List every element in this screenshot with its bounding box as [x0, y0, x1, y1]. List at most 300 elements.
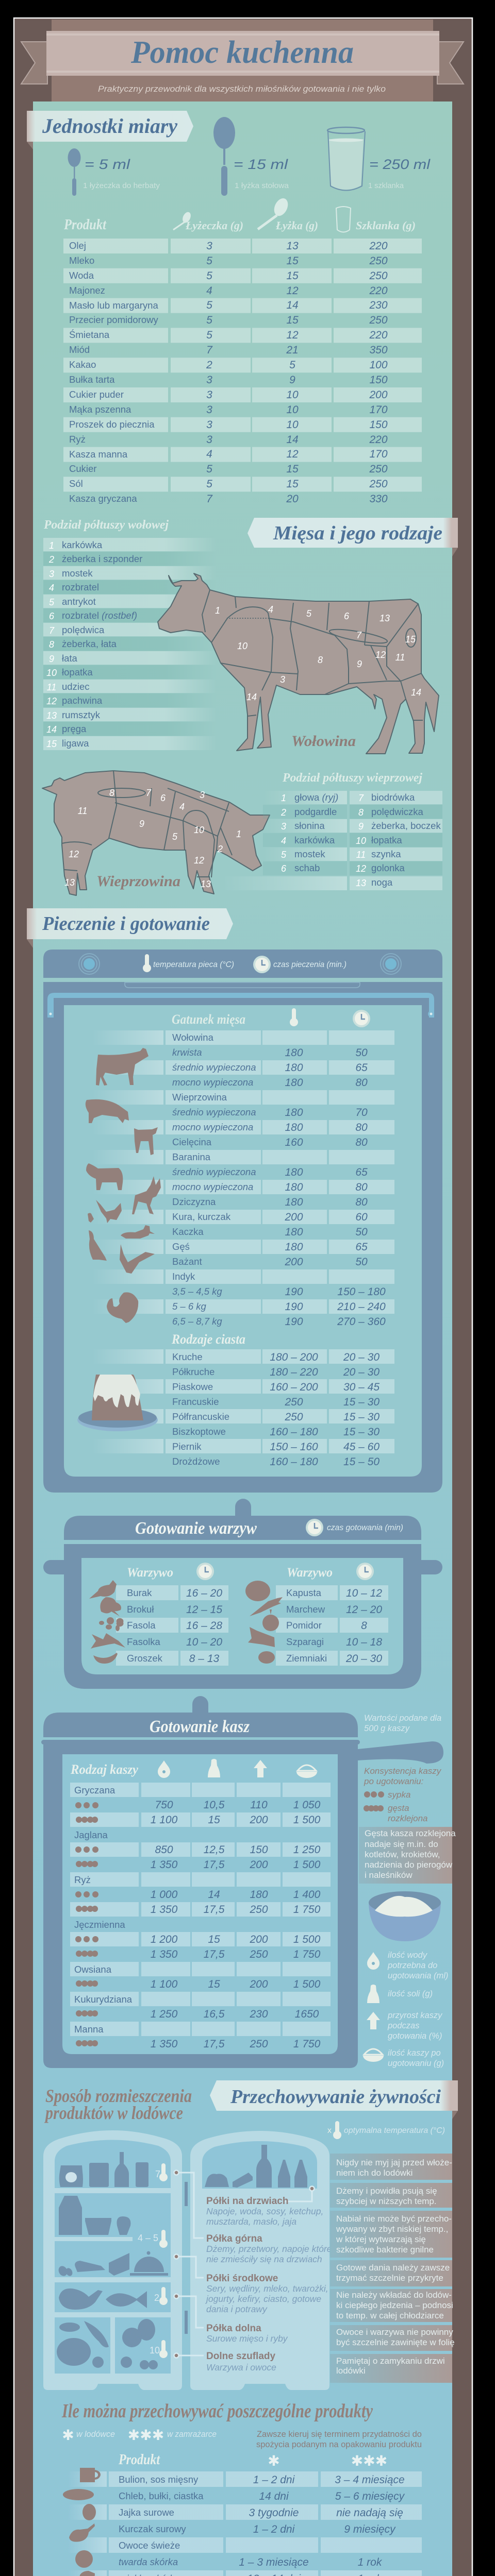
- heading: fridge layout: [44, 2086, 192, 2123]
- heading: Pieczenie i gotowanie: Pieczenie i gotowanie: [42, 913, 210, 935]
- roasting table: Gatunek mięsa: [172, 1012, 245, 1027]
- grain table: 110: [250, 1799, 268, 1811]
- pot: vegetables lid: czas gotowania (min): [327, 1523, 403, 1532]
- pork cuts list: łopatka: [371, 835, 402, 845]
- ribbon tails: [21, 42, 464, 84]
- measures table: 170: [369, 404, 388, 416]
- grain icons legend: ugotowania (ml): [388, 1971, 448, 1980]
- pastry table: Francuskie: [172, 1396, 219, 1407]
- roasting table: 180: [285, 1166, 303, 1178]
- grain table: 1 200: [151, 1934, 178, 1945]
- pig diagram: 13: [64, 877, 75, 888]
- storage table: nie nadają się: [336, 2507, 403, 2519]
- beef cuts list: mostek: [62, 568, 93, 579]
- storage tips: Dżemy i powidła psują się: [336, 2186, 437, 2196]
- beef cuts list: 15: [46, 739, 57, 749]
- storage tips: Nabiał nie może być przecho-: [336, 2214, 452, 2224]
- vegetable cooking table: Fasola: [127, 1620, 156, 1631]
- measure: glass: 1 szklanka: [368, 182, 404, 190]
- beef cuts list: 9: [49, 654, 54, 664]
- beef cuts list: rozbratel: [62, 582, 99, 592]
- storage table: 9 miesięcy: [344, 2523, 396, 2535]
- beef cuts list: żeberka, łata: [62, 638, 117, 649]
- pig diagram: 1: [236, 829, 241, 839]
- pig diagram: 5: [172, 832, 178, 842]
- measures table: 4: [206, 285, 212, 297]
- vegetable cooking table: 20 – 30: [345, 1653, 382, 1665]
- roasting table: Wołowina: [172, 1032, 214, 1043]
- pork cuts list: 11: [356, 850, 366, 860]
- legend: fridge and freezer: ✱✱✱: [128, 2427, 164, 2444]
- grain icons legend: ugotowaniu (g): [388, 2059, 444, 2068]
- roasting table: 200: [284, 1211, 303, 1223]
- vegetable cooking table: 10 – 18: [346, 1636, 382, 1648]
- roasting table: 150 – 180: [337, 1286, 386, 1298]
- heading: fridge layout: Sposób rozmieszczenia: [45, 2086, 192, 2106]
- grain table: 17,5: [204, 1948, 225, 1960]
- measures table header: Łyżeczka (g): [185, 219, 243, 232]
- storage table: twarda skórka: [119, 2556, 178, 2567]
- grain table: Jęczmienna: [74, 1919, 125, 1930]
- vegetable cooking table: Warzywo: [127, 1566, 173, 1580]
- pig diagram: 8: [109, 788, 114, 798]
- grain table: 750: [155, 1799, 173, 1811]
- roasting table: 180: [285, 1241, 303, 1253]
- pot: grains lid: [43, 1696, 358, 1737]
- grain table: 10,5: [204, 1799, 225, 1811]
- icons: deli and cooked food: [57, 2251, 168, 2277]
- pastry table: 15 – 30: [343, 1426, 380, 1438]
- measures table: Cukier puder: [69, 389, 124, 400]
- vegetable cooking table: Warzywo: [287, 1566, 333, 1580]
- fridge shelf descriptions: Półki środkowe: [206, 2273, 278, 2284]
- pig diagram: 11: [78, 806, 87, 816]
- pastry table: 15 – 30: [343, 1411, 380, 1423]
- cow diagram: 8: [318, 655, 323, 665]
- measures table: 3: [206, 419, 212, 431]
- note: use-by date: [256, 2430, 422, 2449]
- beef cuts list: pręga: [62, 723, 87, 734]
- note: use-by date: spożycia podanym na opakowaniu produktu: [256, 2440, 422, 2449]
- temperature labels: [138, 2163, 168, 2358]
- fridge shelf descriptions: Dżemy, przetwory, napoje które: [206, 2244, 332, 2254]
- grain icons legend: ilość soli (g): [388, 1989, 433, 1998]
- measures table: Olej: [69, 240, 86, 251]
- note: values per 500 g: Wartości podane dla: [364, 1714, 441, 1723]
- grain table: 1 050: [293, 1799, 321, 1811]
- grain table: Owsiana: [74, 1964, 112, 1975]
- fridge shelf descriptions: Półka dolna: [206, 2323, 261, 2334]
- measures table: 14: [286, 434, 299, 446]
- icons: door shelf items: [205, 2145, 307, 2188]
- cow diagram: 6: [344, 611, 350, 621]
- temperature legend: [327, 2121, 445, 2139]
- cow diagram: 14: [411, 687, 421, 698]
- grain table: 1 500: [293, 1859, 321, 1871]
- storage tips: w której wytwarzają się: [336, 2234, 426, 2244]
- measures table: 5: [206, 299, 212, 311]
- grain table: 1 350: [151, 2038, 178, 2050]
- vegetable cooking table: Brokuł: [127, 1604, 154, 1615]
- pastry table: 160 – 200: [270, 1381, 318, 1393]
- vegetable cooking table: Burak: [127, 1587, 152, 1598]
- storage table: 1 rok: [358, 2556, 383, 2568]
- title ribbon: [46, 31, 439, 76]
- pork cuts list: 8: [358, 807, 364, 818]
- storage tips: [330, 2154, 455, 2383]
- fridge shelf descriptions: Półki na drzwiach: [206, 2196, 288, 2207]
- oven control panel: czas pieczenia (min.): [273, 960, 346, 969]
- roasting table: 6,5 – 8,7 kg: [172, 1316, 222, 1327]
- pastry table: 15 – 50: [343, 1456, 380, 1468]
- pastry table: 180 – 220: [270, 1366, 318, 1378]
- heading: storage durations: Ile można przechowywać poszczególne produkty: [61, 2400, 373, 2422]
- beef cuts list: 2: [48, 554, 54, 565]
- beef cuts list: antrykot: [62, 596, 96, 607]
- grain table: 150: [250, 1844, 268, 1856]
- measures table: Kasza manna: [69, 449, 128, 460]
- pork cuts list: polędwiczka: [371, 806, 423, 817]
- vegetable cooking table: 8 – 13: [189, 1653, 220, 1665]
- beef cuts list: ligawa: [62, 738, 89, 749]
- grain table: 200: [249, 1934, 268, 1945]
- consistency legend: po ugotowaniu:: [364, 1776, 424, 1786]
- roasting table: 180: [285, 1107, 303, 1118]
- icon: cake: [77, 1375, 158, 1431]
- heading: Jednostki miary: Jednostki miary: [42, 114, 177, 138]
- grain table: Gryczana: [74, 1785, 116, 1795]
- pastry table: 160 – 180: [270, 1456, 318, 1468]
- vegetable cooking table: 8: [361, 1620, 367, 1632]
- grain icons legend: ilość kaszy po: [388, 2048, 441, 2058]
- measures table: 20: [286, 493, 299, 505]
- measures table: 220: [369, 434, 388, 446]
- grain table: 17,5: [204, 2038, 225, 2050]
- roasting table: Gęś: [172, 1241, 190, 1252]
- roasting table: 65: [355, 1241, 368, 1253]
- measures table: 250: [369, 255, 388, 267]
- grain table: 250: [249, 2038, 268, 2050]
- pork cuts list: mostek: [294, 849, 325, 859]
- roasting table: 3,5 – 4,5 kg: [172, 1286, 222, 1297]
- measures table: 14: [286, 299, 299, 311]
- measures table: Woda: [69, 270, 94, 281]
- beef cuts list: 12: [46, 696, 57, 706]
- measures table: Sól: [69, 478, 83, 489]
- roasting table: 50: [355, 1226, 368, 1238]
- roasting table: 80: [355, 1077, 368, 1089]
- beef cuts list: łata: [62, 653, 78, 664]
- roasting table: 180: [285, 1122, 303, 1133]
- roasting table: średnio wypieczona: [172, 1107, 256, 1117]
- grain table: 200: [249, 1978, 268, 1990]
- fridge shelf descriptions: [205, 2196, 332, 2372]
- measures table: 150: [369, 374, 388, 386]
- pork cuts list: 10: [356, 836, 366, 846]
- grain table: 1 500: [293, 1978, 321, 1990]
- temperature labels: 10: [150, 2345, 160, 2355]
- grain table: 230: [249, 2008, 268, 2020]
- vegetable cooking table: Kapusta: [286, 1587, 322, 1598]
- pastry table: 20 – 30: [343, 1366, 380, 1378]
- measures table: 150: [369, 419, 388, 431]
- measures table: 5: [206, 463, 212, 475]
- grain table: 1 350: [151, 1948, 178, 1960]
- measures table: 12: [286, 285, 299, 297]
- note: values per 500 g: 500 g kaszy: [364, 1724, 410, 1733]
- storage table: 14 dni: [259, 2490, 289, 2502]
- consistency legend: gęsta: [388, 1803, 409, 1813]
- cow diagram: 3: [280, 674, 285, 685]
- pastry table: Półkruche: [172, 1366, 214, 1377]
- storage tips: lodówki: [336, 2366, 366, 2376]
- measures table: Kasza gryczana: [69, 493, 137, 504]
- storage tips: trzymać szczelnie przykryte: [336, 2273, 443, 2283]
- fridge interior: [43, 2130, 182, 2390]
- beef cuts list: 10: [46, 668, 57, 678]
- measures table header: Szklanka (g): [356, 219, 416, 232]
- pig diagram: 12: [69, 849, 79, 859]
- grain table: 1650: [295, 2008, 319, 2020]
- storage tips: wywany w zbyt niskiej temp.,: [336, 2224, 448, 2234]
- note: values per 500 g: [364, 1714, 441, 1733]
- vegetable cooking table: Ziemniaki: [286, 1653, 327, 1664]
- grain icons legend: podczas: [387, 2021, 419, 2030]
- grain table: 14: [208, 1889, 220, 1901]
- consistency legend: rozklejona: [388, 1814, 428, 1823]
- pork cuts list: noga: [371, 877, 393, 888]
- grain table: 1 500: [293, 1814, 321, 1826]
- roasting table: mocno wypieczona: [172, 1122, 253, 1132]
- beef cuts list: 14: [46, 724, 57, 735]
- measures table: Kakao: [69, 359, 96, 370]
- fridge shelf descriptions: Warzywa i owoce: [206, 2362, 276, 2372]
- heading: Przechowywanie żywności: Przechowywanie żywności: [230, 2086, 441, 2108]
- beef cuts list: 11: [47, 682, 56, 692]
- measures table: 10: [286, 404, 299, 416]
- grain table: 200: [249, 1859, 268, 1871]
- vegetable cooking table: Groszek: [127, 1653, 163, 1664]
- storage table: 3 tygodnie: [249, 2507, 299, 2519]
- grain table: 250: [249, 1904, 268, 1916]
- roasting table: 180: [285, 1047, 303, 1059]
- beef cuts list: 7: [49, 625, 55, 636]
- cow diagram: 7: [356, 630, 362, 640]
- measures table: Miód: [69, 344, 90, 355]
- grain table: Ryż: [74, 1874, 91, 1885]
- grain table: 16,5: [204, 2008, 225, 2020]
- oven body: [43, 982, 442, 1493]
- roasting table: 5 – 6 kg: [172, 1301, 207, 1312]
- pastry table: Piernik: [172, 1441, 202, 1452]
- measures table: 10: [286, 419, 299, 431]
- cow diagram: 9: [357, 659, 362, 669]
- cow diagram: 15: [405, 634, 416, 645]
- pig diagram: 12: [194, 855, 204, 866]
- roasting table: 50: [355, 1256, 368, 1268]
- icon: grain bowl: [369, 1891, 441, 1941]
- heading: fridge layout: produktów w lodówce: [44, 2103, 183, 2123]
- storage table: Chleb, bułki, ciastka: [119, 2490, 204, 2501]
- pastry table: Rodzaje ciasta: [171, 1332, 245, 1347]
- storage tips: to temp. w całej chłodziarce: [336, 2311, 444, 2320]
- measures table: 100: [369, 359, 388, 371]
- grain icons legend: [363, 1951, 448, 2068]
- vegetable cooking table: 12 – 15: [186, 1604, 222, 1616]
- storage table: Bulion, sos mięsny: [119, 2474, 199, 2485]
- pastry table: 250: [284, 1411, 303, 1423]
- measures table: 170: [369, 448, 388, 460]
- grain table: 1 000: [151, 1889, 178, 1901]
- grain table: 1 100: [151, 1978, 178, 1990]
- measures table: 3: [206, 389, 212, 401]
- measures table: 15: [286, 314, 299, 326]
- pig diagram: 3: [200, 790, 205, 800]
- measures table: 4: [206, 448, 212, 460]
- pork cuts list: 3: [281, 821, 286, 832]
- grain table: 850: [155, 1844, 173, 1856]
- roasting table: 80: [355, 1181, 368, 1193]
- pork cuts list: 9: [358, 821, 364, 832]
- title: Pomoc kuchenna: [130, 35, 354, 70]
- measures table: 12: [286, 448, 299, 460]
- storage tips: szybciej w niższych temp.: [336, 2196, 437, 2206]
- pig diagram: 10: [194, 825, 204, 835]
- storage tips: Gotowe dania należy zawsze: [336, 2263, 450, 2273]
- tip box: thick grain: [359, 1827, 456, 1884]
- header band: [52, 20, 433, 102]
- beef cuts list: 6: [49, 611, 55, 621]
- measure: glass: = 250 ml: [369, 157, 431, 172]
- roasting table: Bażant: [172, 1256, 202, 1267]
- roasting table: 80: [355, 1196, 368, 1208]
- fridge shelf descriptions: Surowe mięso i ryby: [206, 2333, 288, 2344]
- roasting table: 180: [285, 1062, 303, 1074]
- measures table: 2: [206, 359, 212, 371]
- vegetable cooking table: 16 – 28: [186, 1620, 222, 1632]
- measures table header: [63, 196, 416, 233]
- grain icons legend: przyrost kaszy: [387, 2011, 443, 2020]
- measure: tablespoon: 1 łyżka stołowa: [235, 182, 289, 190]
- measures table: 5: [206, 255, 212, 267]
- roasting table: 50: [355, 1047, 368, 1059]
- tip box: thick grain: Gęsta kasza rozklejona: [365, 1828, 456, 1838]
- tip box: thick grain: nadzienia do pierogów: [365, 1860, 453, 1870]
- grain table: [70, 1759, 331, 2050]
- measures table: 7: [206, 493, 213, 505]
- pastry table: Drożdżowe: [172, 1456, 220, 1467]
- roasting table: 180: [285, 1181, 303, 1193]
- measures table: 330: [369, 493, 388, 505]
- grain table: 180: [250, 1889, 268, 1901]
- grain table: Kukurydziana: [74, 1994, 133, 2005]
- storage table: Kurczak surowy: [119, 2523, 186, 2534]
- beef cuts list: udziec: [62, 681, 89, 692]
- grain table: Manna: [74, 2024, 104, 2035]
- pastry table: [92, 1332, 394, 1468]
- measures table: Majonez: [69, 285, 105, 296]
- storage tips: Pamiętaj o zamykaniu drzwi: [336, 2356, 445, 2366]
- roasting table: Kaczka: [172, 1226, 204, 1237]
- pastry table: 15 – 30: [343, 1396, 380, 1408]
- measures table: Mleko: [69, 255, 94, 266]
- measures table: 3: [206, 404, 212, 416]
- roasting table: Dziczyzna: [172, 1196, 216, 1207]
- vegetable cooking table: 12 – 20: [346, 1604, 382, 1616]
- beef cuts list: polędwica: [62, 624, 105, 635]
- measures table: 220: [369, 329, 388, 341]
- measures table: 250: [369, 463, 388, 475]
- pot: vegetables lid: [64, 1499, 421, 1540]
- pig diagram: [42, 771, 270, 895]
- vegetable cooking table: Szparagi: [286, 1636, 324, 1647]
- roasting table: mocno wypieczona: [172, 1077, 253, 1088]
- measures table: 15: [286, 270, 299, 282]
- cow diagram: 1: [215, 605, 220, 616]
- icons: stored products: [58, 2468, 104, 2576]
- roasting table: Kura, kurczak: [172, 1211, 231, 1222]
- roasting table: 200: [284, 1256, 303, 1268]
- measures table: 15: [286, 463, 299, 475]
- heading: Przechowywanie żywności: [210, 2080, 458, 2119]
- icon: oven knobs: [79, 954, 401, 974]
- beef cuts list: 5: [49, 597, 55, 607]
- pastry table: Półfrancuskie: [172, 1411, 229, 1422]
- measure: tablespoon: = 15 ml: [234, 157, 288, 172]
- icons: top shelf jars: [59, 2152, 148, 2187]
- vegetable cooking table: Marchew: [286, 1604, 325, 1615]
- roasting table: Indyk: [172, 1271, 195, 1282]
- cow diagram: 10: [237, 641, 248, 651]
- roasting table: 60: [355, 1211, 368, 1223]
- fridge door: [190, 2131, 329, 2390]
- vegetable cooking table: Fasolka: [127, 1636, 160, 1647]
- icons: vegetables and fruit: [57, 2319, 158, 2369]
- pork cuts list: głowa (ryj): [294, 792, 338, 803]
- beef cuts list: 8: [49, 639, 54, 650]
- fridge shelf descriptions: nie zmieściły się na drzwiach: [206, 2254, 322, 2264]
- temperature legend: optymalna temperatura (°C): [344, 2126, 445, 2135]
- storage tips: ki ciepłego jedzenia – podnosi: [336, 2300, 453, 2310]
- note: use-by date: Zawsze kieruj się terminem przydatności do: [257, 2430, 422, 2439]
- measures table: Proszek do piecznia: [69, 419, 155, 430]
- measures table: 15: [286, 478, 299, 490]
- measures table: 250: [369, 478, 388, 490]
- roasting table: średnio wypieczona: [172, 1062, 256, 1073]
- measures table: 5: [206, 478, 212, 490]
- pot: vegetables body: [43, 1544, 442, 1689]
- measures table: Przecier pomidorowy: [69, 314, 158, 325]
- grain table: 17,5: [204, 1859, 225, 1871]
- storage table: [67, 2452, 422, 2576]
- beef cuts list: pachwina: [62, 695, 103, 706]
- grain icons legend: gotowania (%): [388, 2031, 442, 2041]
- cow diagram: 12: [375, 650, 386, 660]
- measure: glass: [327, 127, 431, 191]
- tip box: thick grain: nadaje się m.in. do: [365, 1839, 438, 1849]
- storage tips: niem ich do lodówki: [336, 2168, 412, 2178]
- roasting table: [92, 1008, 394, 1328]
- storage table: ✱✱✱: [351, 2452, 387, 2469]
- legend: fridge and freezer: w lodówce: [76, 2430, 115, 2439]
- roasting table: 70: [355, 1107, 368, 1118]
- cow diagram: 5: [306, 608, 312, 619]
- pork cuts list: [222, 771, 442, 890]
- measures table: 3: [206, 240, 212, 252]
- pastry table: 250: [284, 1396, 303, 1408]
- pork cuts list: biodrówka: [371, 792, 415, 803]
- pork cuts list: 13: [356, 878, 366, 888]
